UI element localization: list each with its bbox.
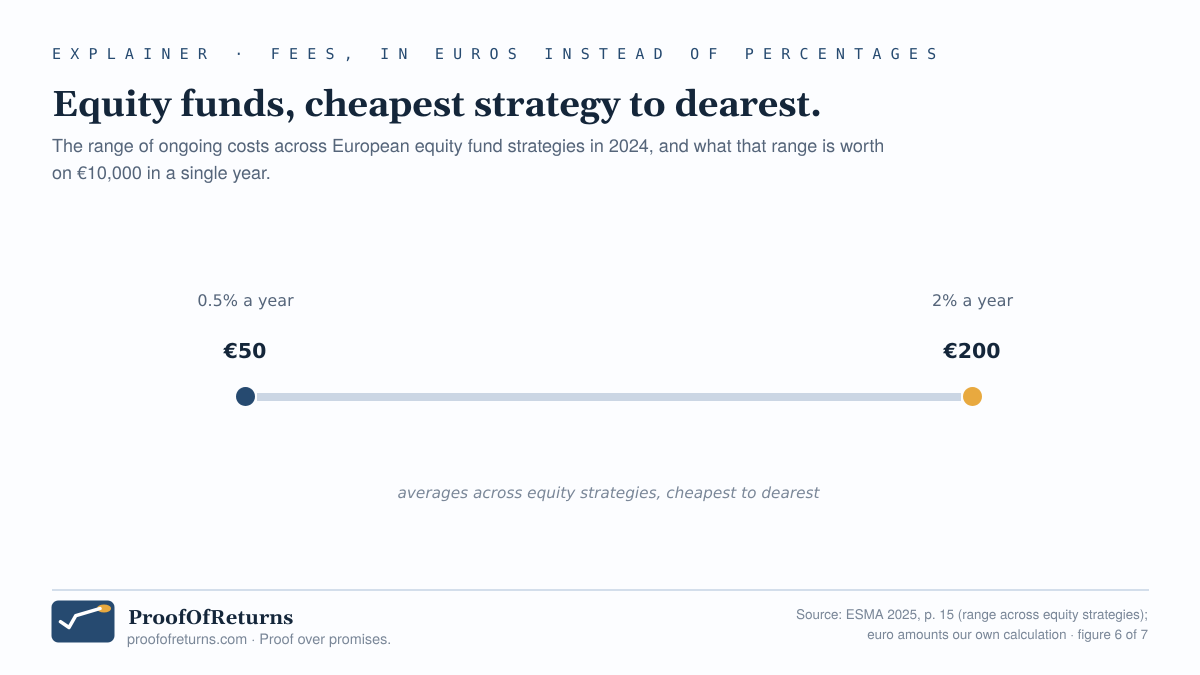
footer rule [52,589,1149,591]
brand tagline: proofofreturns.com · Proof over promises. [127,628,391,649]
subtitle: on €10,000 in a single year. [52,159,271,185]
range bar [257,393,961,401]
label: high end rate: 2% a year [932,291,1013,310]
logo icon [52,600,114,642]
chart caption: averages across equity strategies, cheapest to dearest [398,484,820,502]
subtitle [52,132,884,185]
marker: low end [236,387,255,406]
title: Equity funds, cheapest strategy to dearest. [52,84,822,129]
source note [796,604,1148,642]
label: low end rate: 0.5% a year [197,291,294,310]
brand name: ProofOfReturns [128,605,293,631]
source note: Source: ESMA 2025, p. 15 (range across equity strategies); [796,604,1148,622]
source note: euro amounts our own calculation · figure 6 of 7 [867,624,1148,642]
subtitle: The range of ongoing costs across European equity fund strategies in 2024, and what that range is worth [52,132,884,158]
marker: high end [963,387,982,406]
eyebrow: EXPLAINER · FEES, IN EUROS INSTEAD OF PERCENTAGES [52,45,945,63]
range chart [197,291,1014,502]
value: low end: €50 [223,339,266,363]
value: high end: €200 [942,339,1001,363]
